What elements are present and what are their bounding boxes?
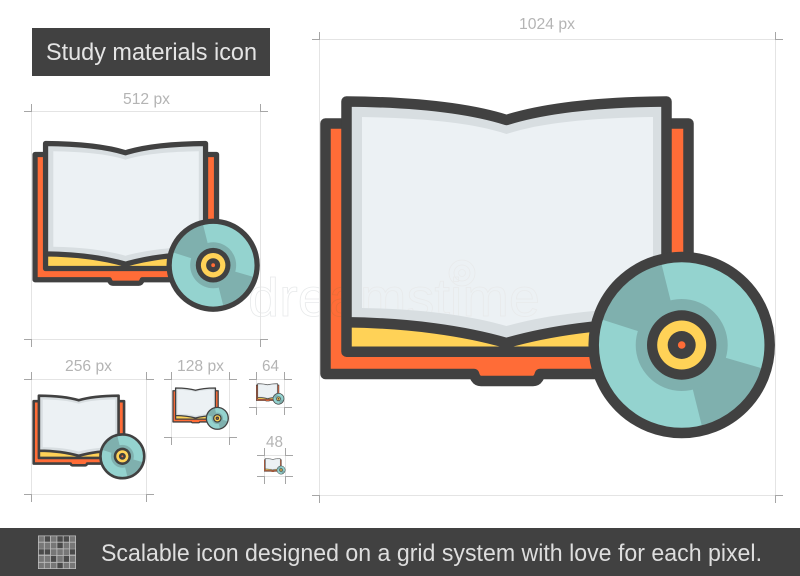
icon: book and disc, 512 px: [35, 143, 257, 309]
size frame: 512 px: [24, 91, 268, 347]
size frame: 48: [257, 434, 293, 484]
size frame: 256 px: 256 px: [65, 358, 112, 375]
icon: book and disc, 128 px: [173, 388, 228, 429]
size frame: 1024 px: 1024 px: [519, 16, 575, 33]
tagline: Scalable icon designed on a grid system with love for each pixel.: [101, 540, 762, 567]
footer bar: [0, 528, 800, 576]
watermark: dreamstime: [248, 268, 540, 328]
icon: book and disc, 64 px: [256, 384, 284, 404]
size frame: 48: 48: [266, 434, 283, 451]
size frame: 512 px: 512 px: [123, 91, 170, 108]
icon: book and disc, 48 px: [264, 459, 285, 474]
title: [32, 28, 270, 76]
size frame: 256 px: [24, 358, 154, 502]
icon: book and disc, 256 px: [34, 396, 144, 478]
size frame: 64: [249, 358, 292, 415]
size frame: 64: 64: [262, 358, 279, 375]
icon: pixel grid: [38, 536, 76, 569]
size frame: 128 px: 128 px: [177, 358, 224, 375]
size frame: 128 px: [164, 358, 237, 445]
title: Study materials icon: [46, 39, 257, 66]
icon: book and disc, 1024 px: [326, 102, 770, 433]
